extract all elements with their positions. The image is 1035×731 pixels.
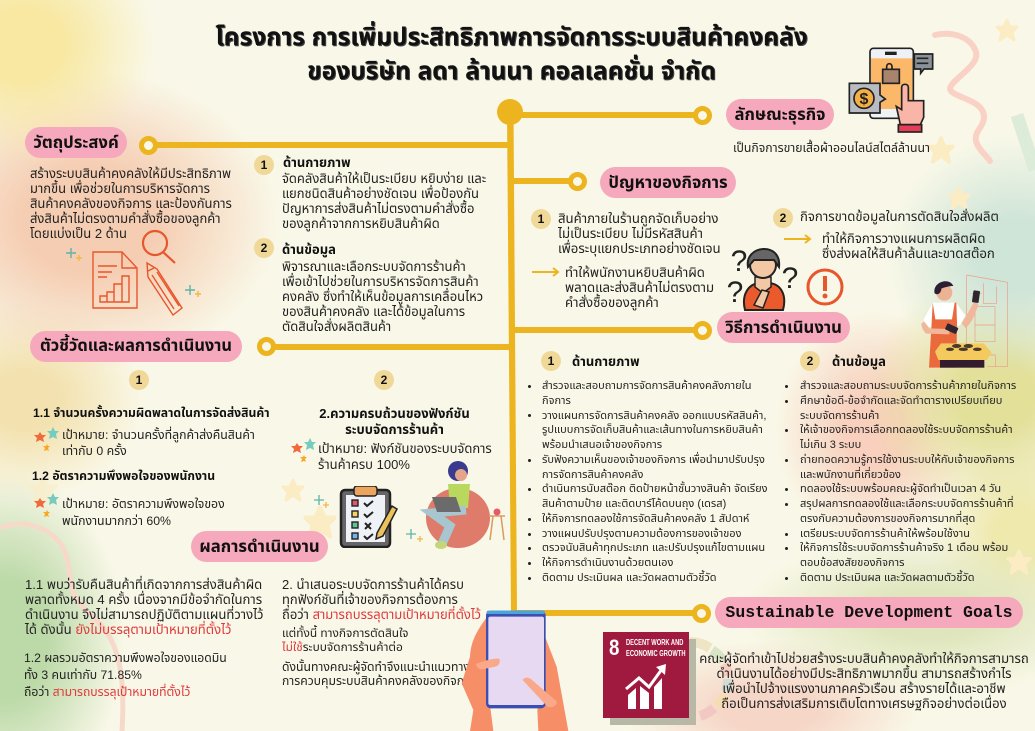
badge 1: 1 [136,373,142,387]
heading: objective: วัตถุประสงค์ [33,133,119,152]
method 1 list: วางแผนการจัดการสินค้าคงคลัง ออกแบบรหัสสินค้า, [542,410,766,422]
method 2 list: ติดตาม ประเมินผล และวัดผลตามตัวชี้วัด [800,572,975,584]
heading: objective [25,127,127,158]
badge 2: 2 [807,354,813,368]
result 1.1 [24,576,263,638]
target 1.1: เท่ากับ 0 ครั้ง [62,444,127,458]
method 1 list [528,380,768,584]
method 2 list: ตอบข้อสงสัยของกิจการ [800,557,904,569]
panel: business type [726,99,930,155]
heading: business type [726,99,834,130]
icon: stars [34,493,59,517]
icon: confused person: ? [731,245,747,278]
method 2 list: ตรงกับความต้องการของกิจการมากที่สุด [800,513,975,525]
icon: hands holding phone [462,610,568,731]
heading: indicators: ตัวชี้วัดและผลการดำเนินงาน [40,337,232,355]
decision note: แต่ทั้งนี้ ทางกิจการตัดสินใจ [282,626,408,640]
decorative SDG wheel [690,637,733,720]
icon: clipboard checklist [340,486,398,548]
method 2 heading: ด้านข้อมูล [832,354,886,369]
indicator 2: 2.ความครบถ้วนของฟังก์ชัน [319,406,470,421]
method 2 list: ทดลองใช้ระบบพร้อมคณะผู้จัดทำเป็นเวลา 4 วัน [800,483,1001,495]
badge 1 [541,351,561,371]
method 2 list: ระบบจัดการร้านค้า [800,410,879,422]
icon: confused person: ? [782,262,798,295]
method 1 heading: ด้านกายภาพ [572,354,640,369]
heading: problems [600,167,736,198]
panel: results [24,531,481,700]
target 2 [318,441,492,472]
SDG 8 badge: 8 [609,635,619,660]
icon: online shop phone [848,48,934,133]
method 1 list: รูปแบบการจัดเก็บสินค้าและเส้นทางในการหยิบสินค้า [542,424,763,436]
panel: SDG [603,597,1029,725]
method 1 list: ให้กิจการทดลองใช้การจัดสินค้าคงคลัง 1 สัปดาห์ [542,513,749,525]
arrow [532,267,560,277]
recommendation note [282,659,475,688]
method 1 list: ดำเนินการนับสต๊อก ติดป้ายหน้าชั้นวางสินค้า จัดเรียง [542,483,768,495]
method 2 list: ถ่ายทอดความรู้การใช้งานระบบให้กับเจ้าของกิจการ [800,454,1014,466]
badge 2: 2 [780,211,786,225]
effect 1 [565,265,714,310]
aspect 1 text: จัดคลังสินค้าให้เป็นระเบียบ หยิบง่าย และ [282,171,486,186]
method 2 list: ศึกษาข้อดี-ข้อจำกัดและจัดทำตารางเปรียบเทียบ [800,395,1002,407]
aspect 2 text: ของสินค้าคงคลัง และได้ข้อมูลในการ [282,304,465,319]
method 1 list: สินค้าตามป้าย และติดบาร์โค้ดบนถุง (เดรส) [542,498,726,510]
method 2 list: ให้เจ้าของกิจการเลือกทดลองใช้ระบบจัดการร้านค้า [800,424,1013,436]
result 2: ทุกฟังก์ชันที่เจ้าของกิจการต้องการ [282,592,458,607]
decision note [282,625,408,654]
method 2 list: ให้กิจการใช้ระบบจัดการร้านค้าจริง 1 เดือน พร้อม [800,542,1008,554]
aspect 1 text: ปัญหาการส่งสินค้าไม่ตรงตามคำสั่งซื้อ [282,201,475,216]
result 1.1: พลาดทั้งหมด 4 ครั้ง เนื่องจากมีข้อจำกัดในการ [25,592,262,607]
result 1.2: ทั้ง 3 คนเท่ากับ 71.85% [24,668,142,682]
method 2 list: สรุปผลการทดลองใช้และเลือกระบบจัดการร้านค้าที่ [800,498,1014,510]
icon: worker at shelves [921,274,1008,368]
badge 1 [129,370,149,390]
method 1 list: ให้กิจการดำเนินงานด้วยตนเอง [542,557,673,569]
indicator 1.1: 1.1 จำนวนครั้งความผิดพลาดในการจัดส่งสินค้า [33,406,270,420]
icon: online shop phone: $ [860,91,869,108]
target 1.2: เป้าหมาย: อัตราความพึงพอใจของ [62,497,225,511]
method 2 list: เตรียมระบบจัดการร้านค้าให้พร้อมใช้งาน [800,528,970,540]
SDG text: คณะผู้จัดทำเข้าไปช่วยสร้างระบบสินค้าคงคลังทำให้กิจการสามารถ [699,651,1029,666]
effect 1: ทำให้พนักงานหยิบสินค้าผิด [565,265,705,280]
target 1.1: เป้าหมาย: จำนวนครั้งที่ลูกค้าส่งคืนสินค้า [62,428,255,442]
method 1 list: กิจการ [542,395,571,407]
icon: report with magnifier and pencil [66,230,201,316]
panel: indicators [30,331,492,528]
panel: objective [25,127,232,316]
heading: method [717,312,850,343]
icon: confused person [727,245,798,311]
method 1 list: การจัดการสินค้าคงคลัง [542,469,643,481]
objective text: ส่งสินค้าไม่ตรงตามคำสั่งซื้อของลูกค้า [30,211,221,226]
heading: results: ผลการดำเนินงาน [199,537,320,556]
arrow [784,234,812,244]
title: โครงการ การเพิ่มประสิทธิภาพการจัดการระบบสินค้าคงคลัง [215,24,808,51]
objective text: มากขึ้น เพื่อช่วยในการบริหารจัดการ [30,181,210,196]
effect 2: ซึ่งส่งผลให้สินค้าล้นและขาดสต๊อก [822,246,995,261]
method 1 list: วางแผนปรับปรุงตามความต้องการของเจ้าของ [542,528,741,540]
heading: indicators [30,331,242,362]
aspect 2 text: ตัดสินใจสั่งผลิตสินค้า [282,319,391,334]
target 2: ร้านค้าครบ 100% [318,457,410,472]
method 2 list: และพนักงานที่เกี่ยวข้อง [800,469,901,481]
problem 1: ไม่เป็นระเบียบ ไม่มีรหัสสินค้า [558,226,703,241]
aspect 1 text: แยกชนิดสินค้าอย่างชัดเจน เพื่อป้องกัน [282,186,479,201]
SDG 8 badge: ECONOMIC GROWTH [626,648,686,658]
target 2: เป้าหมาย: ฟังก์ชันของระบบจัดการ [318,441,492,456]
panel: method [528,312,1016,584]
result 1.2 [24,651,227,700]
badge 2 [374,370,394,390]
indicator 2: ระบบจัดการร้านค้า [345,422,444,436]
title: ของบริษัท ลดา ล้านนา คอลเลคชั่น จำกัด [307,58,716,85]
method 2 list: ไม่เกิน 3 ระบบ [800,439,861,451]
method 1 list: ตรวจนับสินค้าทุกประเภท และปรับปรุงแก้ไขตามแผน [542,542,765,554]
result 1.1: ได้ ดังนั้น ยังไม่บรรลุตามเป้าหมายที่ตั้งไว้ [25,622,231,637]
aspect 2 text: พิจารณาและเลือกระบบจัดการร้านค้า [282,259,466,274]
aspect 2 heading: ด้านข้อมูล [282,242,336,257]
effect 1: พลาดและส่งสินค้าไม่ตรงตาม [565,280,714,295]
badge 2: 2 [261,241,267,255]
result 2: 2. นำเสนอระบบจัดการร้านค้าได้ครบ [282,577,464,592]
heading: problems: ปัญหาของกิจการ [608,173,728,192]
aspect 2 text: คงคลัง ซึ่งทำให้เห็นข้อมูลการเคลื่อนไหว [282,289,483,304]
heading: results [191,531,328,562]
badge 1 [531,209,551,229]
badge 1 [254,155,274,175]
badge 1: 1 [548,354,554,368]
SDG heading [715,597,1023,628]
panel: objective aspects [254,155,486,334]
method 1 list: พร้อมนำเสนอเจ้าของกิจการ [542,439,662,451]
aspect 2 text [282,259,483,334]
target 1.1 [62,426,255,458]
SDG 8 badge: DECENT WORK AND [626,638,683,647]
objective text [30,166,232,241]
objective text: สร้างระบบสินค้าคงคลังให้มีประสิทธิภาพ [30,166,231,181]
business text: เป็นกิจการขายเสื้อผ้าออนไลน์สไตล์ล้านนา [733,141,930,155]
icon: confused person: ? [727,276,743,309]
result 1.2: 1.2 ผลรวมอัตราความพึงพอใจของแอดมิน [24,651,227,665]
aspect 2 text: เพื่อเข้าไปช่วยในการบริหารจัดการสินค้า [282,274,479,289]
SDG text: เพื่อนำไปจ้างแรงงานภาคครัวเรือน สร้างรายได้และอาชีพ [722,681,1006,696]
heading: business type: ลักษณะธุรกิจ [734,105,826,124]
aspect 1 heading: ด้านกายภาพ [283,155,351,170]
method 2 list: สำรวจและสอบถามระบบจัดการร้านค้าภายในกิจการ [800,380,1016,392]
effect 2 [822,231,995,261]
decision note: ไม่ใช้ระบบจัดการร้านค้าต่อ [282,640,403,654]
badge 2 [773,208,793,228]
method 2 list [785,380,1016,584]
SDG text: ดำเนินงานได้อย่างมีประสิทธิภาพมากขึ้น สามารถสร้างกำไร [717,666,1011,681]
method 1 list: ติดตาม ประเมินผล และวัดผลตามตัวชี้วัด [542,572,717,584]
effect 1: คำสั่งซื้อของลูกค้า [565,295,659,310]
aspect 1 text: ของลูกค้าจากการหยิบสินค้าผิด [282,216,440,231]
objective text: โดยแบ่งเป็น 2 ด้าน [30,226,127,241]
icon: warning [806,268,844,306]
result 1.2: ถือว่า สามารถบรรลุเป้าหมายที่ตั้งไว้ [24,685,190,699]
result 2: ถือว่า สามารถบรรลุตามเป้าหมายที่ตั้งไว้ [282,607,481,622]
target 1.2 [62,497,225,528]
aspect 1 text [282,171,486,232]
icon: stars [34,427,59,451]
badge 1: 1 [261,158,267,172]
badge 1: 1 [538,212,544,226]
badge 2: 2 [381,373,387,387]
method 1 list: รับฟังความเห็นของเจ้าของกิจการ เพื่อนำมาปรับปรุง [542,454,765,466]
title [215,21,808,85]
SDG text [699,651,1029,711]
problem 1 [558,211,721,256]
badge 2 [254,238,274,258]
effect 2: ทำให้กิจการวางแผนการผลิตผิด [822,231,985,246]
problem 1: สินค้าภายในร้านถูกจัดเก็บอย่าง [558,211,719,226]
method 1 list: สำรวจและสอบถามการจัดการสินค้าคงคลังภายใน [542,380,751,392]
SDG 8 badge [603,632,696,725]
SDG text: ถือเป็นการส่งเสริมการเติบโตทางเศรษฐกิจอย่างต่อเนื่อง [721,696,1007,711]
result 1.1: 1.1 พบว่ารับคืนสินค้าที่เกิดจากการส่งสินค้าผิด [25,577,262,592]
indicator 2 [319,406,470,436]
problem 1: เพื่อระบุแยกประเภทอย่างชัดเจน [558,241,721,256]
target 1.2: พนักงานมากกว่า 60% [62,514,171,528]
badge 2 [800,351,820,371]
panel: problems [531,167,999,310]
indicator 1.2: 1.2 อัตราความพึงพอใจของพนักงาน [32,469,215,483]
result 2 [282,577,481,622]
recommendation note: ดังนั้นทางคณะผู้จัดทำจึงแนะนำแนวทาง [282,660,470,674]
SDG heading: Sustainable Development Goals [725,603,1013,622]
heading: method: วิธีการดำเนินงาน [725,318,842,337]
recommendation note: การควบคุมระบบสินค้าคงคลังของกิจการ [282,674,475,688]
objective text: สินค้าคงคลังของกิจการ และป้องกันการ [30,196,232,211]
icon: woman on bean bag with laptop [420,461,505,549]
problem 2: กิจการขาดข้อมูลในการตัดสินใจสั่งผลิต [800,209,999,224]
icon: stars [291,438,316,462]
result 1.1: ดำเนินงาน จึงไม่สามารถปฏิบัติตามแผนที่วางไว้ [25,607,263,622]
